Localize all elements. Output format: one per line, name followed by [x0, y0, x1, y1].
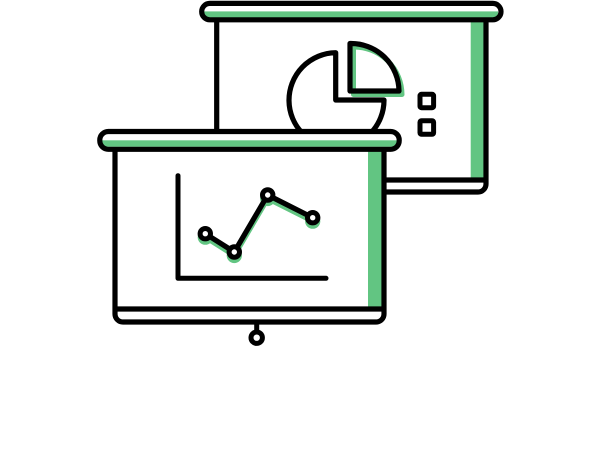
front screen outline [115, 148, 384, 322]
back screen outline [217, 18, 486, 192]
pie slice shadow [354, 47, 402, 94]
front screen green edge [368, 148, 382, 307]
panel: back projection screen [202, 3, 501, 192]
line chart [178, 176, 326, 278]
front screen body [115, 140, 384, 322]
pie body [289, 53, 384, 148]
data points [200, 190, 318, 257]
line chart shadow [205, 198, 313, 256]
pull cord [251, 322, 262, 343]
legend squares [420, 94, 434, 134]
back screen body [217, 12, 486, 192]
back screen green edge [471, 18, 484, 178]
data line [205, 195, 313, 252]
pie slice [350, 43, 399, 91]
pie chart [289, 43, 402, 148]
back roller bar [202, 3, 501, 20]
panel: front projection screen [100, 132, 399, 343]
front roller bar [100, 132, 399, 149]
chart axes [178, 176, 326, 278]
